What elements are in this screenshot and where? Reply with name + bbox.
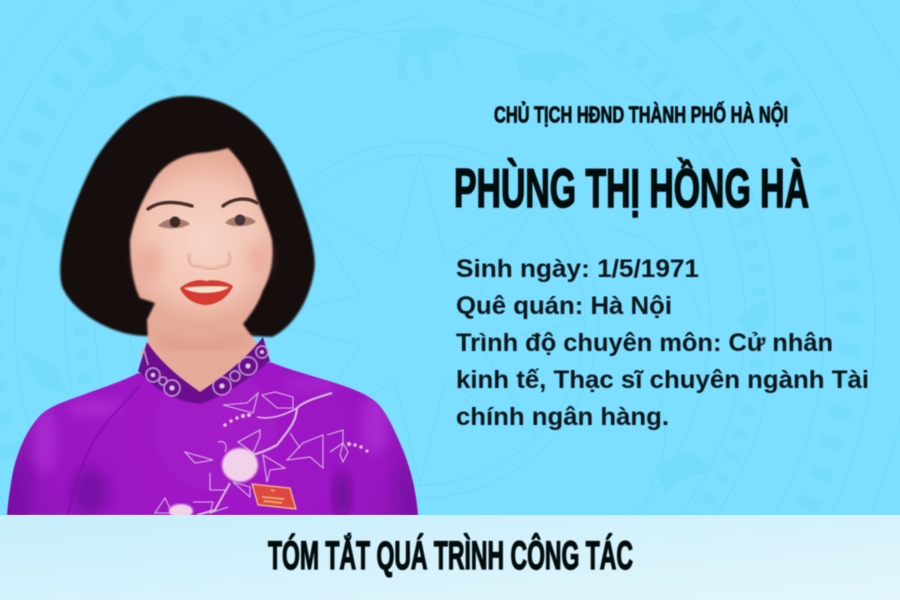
lower rose xyxy=(169,504,193,518)
background pattern: stylised birds and deer xyxy=(20,10,770,495)
biography text: kinh tế, Thạc sĩ chuyên ngành Tài xyxy=(456,366,869,394)
biography text: Quê quán: Hà Nội xyxy=(456,292,672,320)
biography text xyxy=(456,255,869,431)
embroidery dots xyxy=(223,413,369,453)
sleeve seams and dress shading xyxy=(10,377,415,520)
chin shadow xyxy=(158,336,246,346)
subtitle: CHỦ TỊCH HĐND THÀNH PHỐ HÀ NỘI xyxy=(494,100,788,128)
portrait of Phùng Thị Hồng Hà xyxy=(7,96,418,520)
biography text: chính ngân hàng. xyxy=(456,403,669,431)
embroidered rose xyxy=(222,448,258,482)
biography text: Sinh ngày: 1/5/1971 xyxy=(456,255,699,283)
mouth xyxy=(180,280,233,305)
bottom band xyxy=(0,515,900,600)
cheeks shading xyxy=(137,242,269,280)
hair xyxy=(60,96,315,337)
nose xyxy=(189,252,230,269)
face and neck xyxy=(130,148,273,396)
eyebrows xyxy=(148,199,257,209)
eyes xyxy=(158,214,256,228)
embroidered flower branch xyxy=(155,392,348,515)
collar xyxy=(138,337,270,404)
biography text: Trình độ chuyên môn: Cử nhân xyxy=(456,329,833,357)
party badge xyxy=(252,484,296,509)
section title: TÓM TẮT QUÁ TRÌNH CÔNG TÁC xyxy=(268,532,633,578)
dress xyxy=(7,362,418,515)
